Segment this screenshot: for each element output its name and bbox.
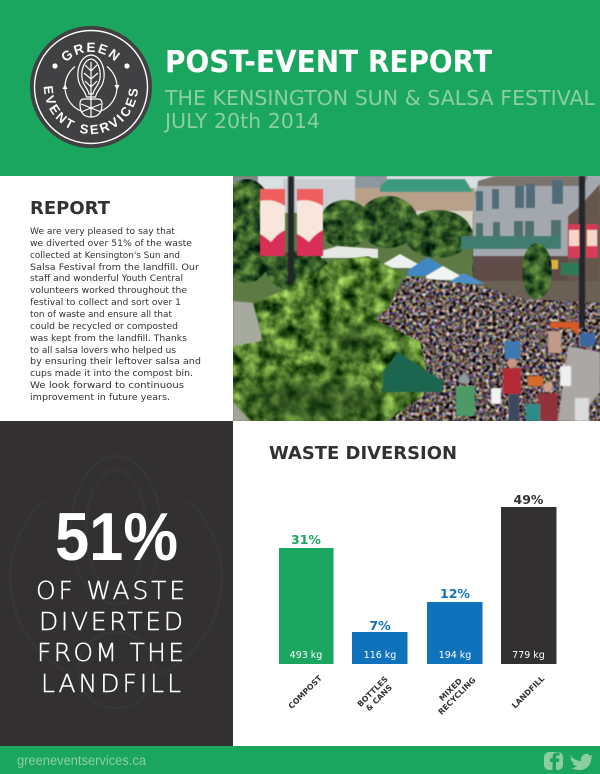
subtitle: THE KENSINGTON SUN & SALSA FESTIVAL xyxy=(164,86,596,110)
watermark: leaf emblem xyxy=(10,456,222,708)
report text: cups made it into the compost bin. xyxy=(30,369,193,379)
townhouses xyxy=(472,176,600,257)
report text xyxy=(30,227,201,403)
banners xyxy=(260,189,598,258)
panel: report xyxy=(0,176,233,421)
bar: bottles and cans: 7% xyxy=(369,618,391,633)
header band xyxy=(0,0,600,176)
title: POST-EVENT REPORT xyxy=(165,45,492,80)
axis label: bottles and cans: BOTTLES xyxy=(356,674,390,709)
icon: twitter xyxy=(570,754,592,770)
bar: compost: 493 kg xyxy=(290,650,322,661)
report text: could be recycled or composted xyxy=(30,322,178,332)
logo text: EVENT SERVICES: EVENT SERVICES xyxy=(44,86,138,134)
foreground people xyxy=(503,368,521,394)
heading: waste diversion: WASTE DIVERSION xyxy=(269,443,457,464)
subtitle: JULY 20th 2014 xyxy=(163,109,320,133)
bar: landfill: 779 kg xyxy=(512,650,545,661)
sidewalk xyxy=(233,301,263,348)
bar: mixed recycling xyxy=(427,586,482,664)
report text: to all salsa lovers who helped us xyxy=(30,346,176,356)
tree shadow xyxy=(243,325,383,423)
report text: we diverted over 51% of the waste xyxy=(30,239,192,249)
logo badge xyxy=(30,26,152,148)
icon: facebook xyxy=(544,752,563,770)
bar: mixed recycling: 12% xyxy=(440,586,470,601)
report text: by ensuring their leftover salsa and xyxy=(30,357,201,367)
bar: landfill xyxy=(501,492,556,664)
bar: bottles and cans xyxy=(352,618,408,664)
background trees xyxy=(233,179,474,290)
distant towers xyxy=(283,179,355,213)
axis label: mixed recycling: RECYCLING xyxy=(437,676,478,717)
footer band xyxy=(0,746,600,774)
stat caption xyxy=(36,576,185,698)
subtitle xyxy=(163,86,596,133)
report text: collected at Kensington's Sun and xyxy=(30,251,180,261)
bar chart xyxy=(279,492,556,717)
bar: bottles and cans: 116 kg xyxy=(364,650,396,661)
bar: landfill: 49% xyxy=(514,492,544,507)
report text: ton of waste and ensure all that xyxy=(30,310,173,320)
foreground tree xyxy=(233,256,428,421)
axis label: landfill: LANDFILL xyxy=(510,674,546,710)
report text: volunteers worked throughout the xyxy=(30,286,187,296)
photo: festival street crowd xyxy=(217,176,600,423)
report text: was kept from the landfill. Thanks xyxy=(30,334,187,344)
report text: improvement in future years. xyxy=(30,393,170,403)
axis label: compost: COMPOST xyxy=(287,673,324,711)
bar: compost: 31% xyxy=(291,532,321,547)
report text: We look forward to continuous xyxy=(30,381,184,391)
bar: compost xyxy=(279,532,334,664)
heading: report: REPORT xyxy=(30,198,111,219)
stat caption: DIVERTED xyxy=(39,607,183,636)
market tent xyxy=(383,352,443,392)
bar: mixed recycling: 194 kg xyxy=(439,650,471,661)
stat caption: OF WASTE xyxy=(36,576,185,605)
crowd xyxy=(378,276,600,421)
small street tree xyxy=(522,243,552,299)
stat caption: LANDFILL xyxy=(41,669,181,698)
stat caption: FROM THE xyxy=(37,638,184,667)
report text: staff and wonderful Youth Central xyxy=(30,274,183,284)
axis label: mixed recycling: MIXED xyxy=(437,676,464,703)
report text: Salsa Festival from the landfill. Our xyxy=(30,263,199,273)
big number: 51% xyxy=(55,499,178,575)
logo text: GREEN: GREEN xyxy=(62,42,120,61)
report text: We are very pleased to say that xyxy=(30,227,176,237)
website: greeneventservices.ca xyxy=(17,753,146,768)
tents xyxy=(383,254,418,268)
report text: festival to collect and sort over 1 xyxy=(30,298,181,308)
poles xyxy=(288,176,294,283)
logo icon: leaf and footprint xyxy=(65,55,117,117)
axis label: bottles and cans: & CANS xyxy=(364,683,394,713)
panel: 51% stat xyxy=(0,421,233,746)
road xyxy=(558,346,600,421)
